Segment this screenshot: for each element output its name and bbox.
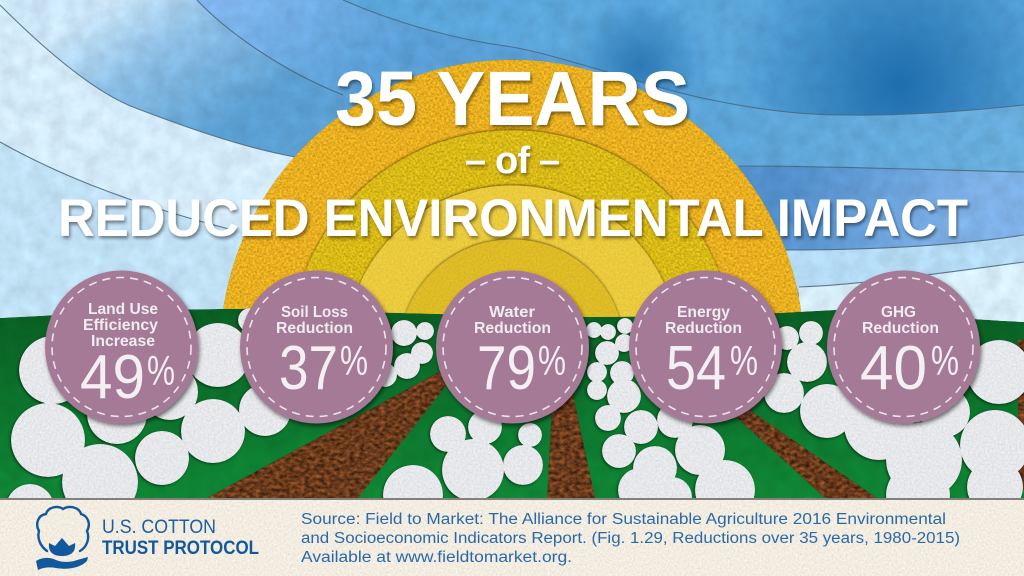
icon: cotton boll outline xyxy=(37,507,89,551)
cotton bolls xyxy=(6,307,1024,498)
source note: and Socioeconomic Indicators Report. (Fig. 1.29, Reductions over 35 years, 1980-2015) xyxy=(301,530,960,547)
badge: GHG 40% xyxy=(827,270,980,424)
sky background xyxy=(0,0,1024,330)
title line: 35 YEARS: 35 YEARS xyxy=(335,56,690,142)
badge: land use efficiency 49%: Land Use xyxy=(88,301,158,318)
badge: GHG 40%: Reduction xyxy=(862,320,939,337)
badge: land use efficiency 49%: Efficiency xyxy=(83,317,158,334)
green field xyxy=(0,309,1024,498)
badge: GHG 40%: GHG xyxy=(881,304,916,321)
canvas footer strip xyxy=(0,498,1024,576)
badge: energy 54%: Reduction xyxy=(665,320,742,337)
badge: water 79%: 79 xyxy=(477,334,536,403)
badge: water 79% xyxy=(436,270,589,424)
title line: reduced environmental impact: REDUCED ENVIRONMENTAL IMPACT xyxy=(58,189,968,248)
logo: U.S. Cotton Trust Protocol xyxy=(36,507,259,570)
icon: lotus in hand xyxy=(36,538,88,570)
logo wordmark line 1: U.S. COTTON xyxy=(102,517,216,538)
badge: land use efficiency 49%: 49 xyxy=(80,343,145,412)
badge: soil loss 37%: % xyxy=(340,337,368,384)
brown soil furrows xyxy=(207,340,1024,498)
badge: soil loss 37% xyxy=(240,270,393,424)
badge: soil loss 37%: 37 xyxy=(279,334,338,403)
sun with concentric rings xyxy=(221,60,803,330)
source note xyxy=(301,511,960,566)
logo wordmark line 2: TRUST PROTOCOL xyxy=(102,538,259,559)
badge: water 79%: Water xyxy=(489,304,535,321)
badge: land use efficiency 49%: Increase xyxy=(91,333,155,350)
badge: energy 54%: Energy xyxy=(677,304,730,321)
badge: energy 54% xyxy=(629,270,782,424)
badge: land use efficiency 49% xyxy=(45,270,198,424)
title xyxy=(58,56,968,248)
badge: land use efficiency 49%: % xyxy=(147,347,175,394)
badge: GHG 40%: % xyxy=(931,337,959,384)
title line: of: – of – xyxy=(465,140,560,182)
source note: Source: Field to Market: The Alliance for Sustainable Agriculture 2016 Environmental xyxy=(301,511,946,528)
badge: water 79%: % xyxy=(538,337,566,384)
badge: GHG 40%: 40 xyxy=(860,334,927,403)
badge: energy 54%: % xyxy=(730,337,758,384)
badge: soil loss 37%: Reduction xyxy=(276,320,353,337)
badge: water 79%: Reduction xyxy=(474,320,551,337)
source note: Available at www.fieldtomarket.org. xyxy=(301,549,572,566)
badge: soil loss 37%: Soil Loss xyxy=(281,304,348,321)
badge: energy 54%: 54 xyxy=(666,334,726,403)
